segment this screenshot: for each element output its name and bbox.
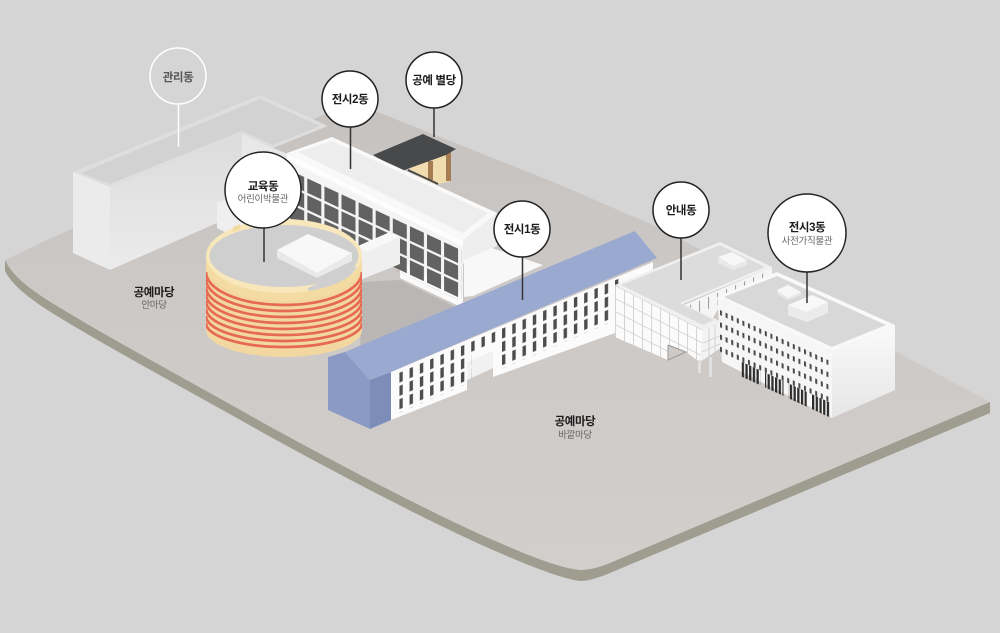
label: 공예마당 바깥마당: 바깥마당 [558, 429, 592, 441]
building: 교육동 [206, 219, 362, 357]
building: 전시2동 [287, 137, 543, 308]
callout: 전시2동: 전시2동 [332, 93, 369, 106]
small windows [720, 310, 832, 410]
grid facade [615, 285, 703, 360]
facade [287, 160, 463, 300]
callout: 전시1동 [494, 201, 550, 300]
callout: 전시1동: 전시1동 [504, 223, 541, 236]
large roof box [788, 302, 828, 322]
callout: 전시2동 [322, 71, 378, 169]
facade windows [290, 170, 461, 301]
ground edge band [5, 260, 990, 581]
callout: 교육동: 어린이박물관 [238, 194, 289, 205]
body [206, 257, 362, 357]
callout: 전시3동: 사전가직물관 [782, 236, 833, 247]
stripes [206, 272, 362, 347]
roof [345, 231, 657, 380]
facade [391, 262, 653, 420]
building: 전시1동 [328, 231, 657, 429]
fascia [287, 153, 463, 247]
별당 eave strip [408, 170, 438, 184]
right facade [832, 325, 895, 418]
callout: 공예 별당: 공예 별당 [412, 74, 457, 87]
roof [717, 272, 895, 352]
callout: 공예 별당 [406, 52, 462, 137]
callout: 관리동 [150, 48, 206, 147]
entrance recess [467, 351, 493, 380]
bridge [358, 232, 400, 280]
roof box [718, 257, 747, 270]
building: 관리동 [73, 95, 328, 270]
tall windows [742, 362, 830, 418]
callout: 안내동: 안내동 [666, 203, 697, 217]
building: 안내동 [615, 242, 772, 377]
ground surface [5, 105, 990, 570]
label: 공예마당 안마당 [134, 286, 175, 311]
callout: 안내동 [653, 182, 709, 280]
low annex [464, 248, 543, 297]
return face [700, 322, 722, 362]
callout: 교육동 [225, 152, 301, 262]
callout: 관리동: 관리동 [163, 71, 194, 84]
label: 공예마당 바깥마당: 공예마당 [555, 415, 596, 428]
building: 전시3동 [717, 272, 895, 418]
roof [210, 225, 358, 287]
plinth [400, 262, 463, 308]
callout: 전시3동 [768, 194, 846, 303]
label: 공예마당 안마당: 공예마당 [134, 286, 175, 299]
side wall [463, 213, 497, 264]
roof box [277, 250, 352, 278]
ground plaza [5, 105, 990, 581]
small roof box [777, 290, 801, 300]
building: 공예 별당 [373, 134, 456, 186]
windows [399, 278, 620, 413]
courtyard shadow [360, 280, 470, 350]
callout: 전시3동: 전시3동 [789, 221, 826, 234]
posts [698, 360, 701, 373]
label: 공예마당 안마당: 안마당 [141, 300, 167, 311]
rim [206, 256, 362, 301]
callout: 교육동: 교육동 [248, 180, 279, 193]
roof [615, 242, 772, 330]
end wall [328, 352, 370, 429]
label: 공예마당 바깥마당 [555, 415, 596, 441]
left facade [717, 297, 832, 418]
back fence [684, 267, 772, 318]
entrance [668, 345, 686, 360]
roof [287, 137, 497, 240]
